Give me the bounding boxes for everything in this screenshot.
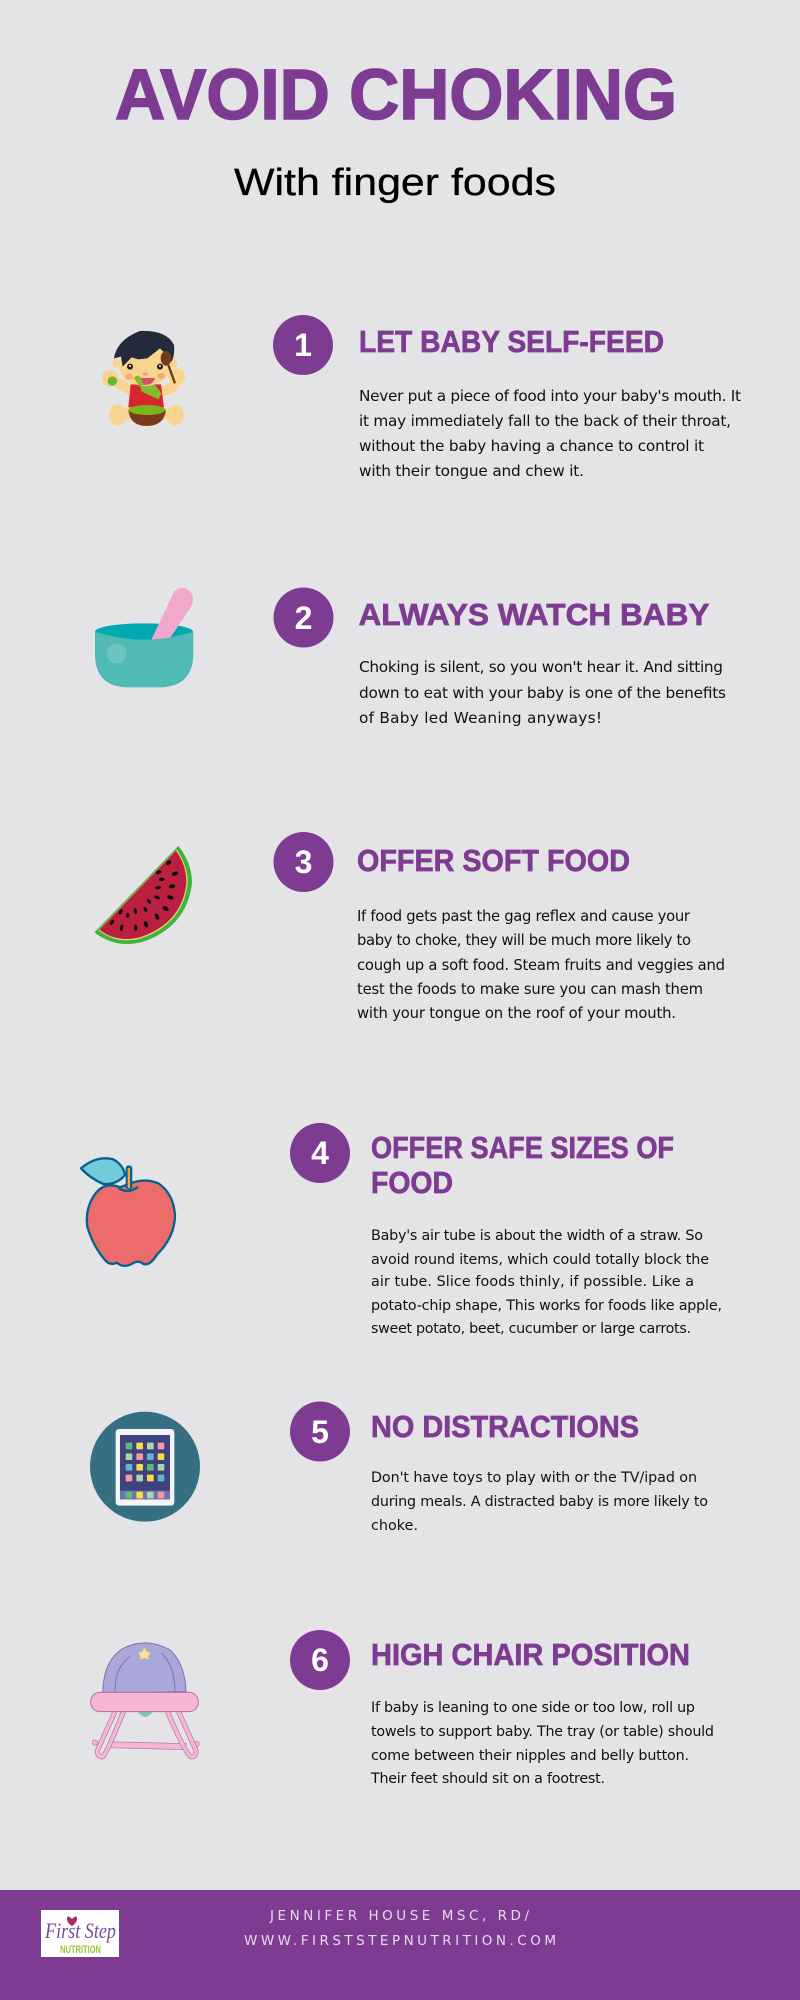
credit text: WWW.FIRSTSTEPNUTRITION.COM <box>244 1933 556 1949</box>
number badge 2 <box>274 588 334 648</box>
text block 3: test the foods to make sure you can mash them <box>357 981 703 998</box>
number badge 6 <box>290 1630 350 1690</box>
heading 4: OFFER SAFE SIZES OF <box>371 1131 674 1165</box>
text block 2: down to eat with your baby is one of the benefits <box>359 684 726 702</box>
title: AVOID CHOKING <box>115 56 677 135</box>
step 4 <box>81 1123 722 1337</box>
logo: First Step <box>44 1918 116 1943</box>
text block 3: cough up a soft food. Steam fruits and veggies and <box>357 957 725 974</box>
heading 4: FOOD <box>371 1166 453 1200</box>
text block 1 <box>359 387 741 480</box>
text block 6: come between their nipples and belly button. <box>371 1748 689 1764</box>
number badge 6: 6 <box>311 1642 329 1678</box>
text block 1: without the baby having a chance to control it <box>359 437 704 455</box>
text block 4: avoid round items, which could totally block the <box>371 1252 709 1268</box>
text block 4: Baby's air tube is about the width of a straw. So <box>371 1228 703 1244</box>
number badge 5 <box>290 1402 350 1462</box>
text block 5: Don't have toys to play with or the TV/ipad on <box>371 1470 697 1486</box>
text block 4: air tube. Slice foods thinly, if possible. Like a <box>371 1274 694 1290</box>
number badge 2: 2 <box>295 600 312 636</box>
text block 2: of Baby led Weaning anyways! <box>359 709 602 727</box>
text block 1: Never put a piece of food into your baby's mouth. It <box>359 387 741 405</box>
subtitle: With finger foods <box>234 162 556 204</box>
icon: apple <box>81 1158 175 1266</box>
credit text <box>244 1908 556 1949</box>
heading 3: OFFER SOFT FOOD <box>357 844 630 878</box>
footer band <box>0 1890 800 2000</box>
text block 6 <box>370 1700 714 1787</box>
text block 3: with your tongue on the roof of your mouth. <box>357 1005 676 1022</box>
step 3 <box>94 832 725 1022</box>
footer <box>0 1890 800 2000</box>
icon: high chair <box>91 1643 199 1757</box>
number badge 4 <box>290 1123 350 1183</box>
text block 6: towels to support baby. The tray (or table) should <box>371 1724 714 1740</box>
step 6 <box>91 1630 714 1787</box>
text block 5: choke. <box>371 1518 418 1534</box>
text block 1: with their tongue and chew it. <box>359 462 584 480</box>
number badge 1: 1 <box>294 327 312 363</box>
heading 2: ALWAYS WATCH BABY <box>358 598 710 632</box>
text block 4: sweet potato, beet, cucumber or large carrots. <box>371 1321 691 1337</box>
text block 3: baby to choke, they will be much more likely to <box>357 932 691 949</box>
number badge 1 <box>273 315 333 375</box>
text block 1: it may immediately fall to the back of their throat, <box>359 412 731 430</box>
step 2 <box>95 588 726 727</box>
icon: watermelon <box>94 846 192 944</box>
text block 5 <box>371 1470 708 1534</box>
text block 3 <box>357 908 725 1022</box>
number badge 5: 5 <box>311 1414 329 1450</box>
heading 6: HIGH CHAIR POSITION <box>371 1638 690 1672</box>
text block 3: If food gets past the gag reflex and cause your <box>357 908 691 925</box>
text block 2 <box>359 658 726 727</box>
step 5 <box>90 1402 708 1534</box>
step 1 <box>102 315 741 480</box>
credit text: JENNIFER HOUSE MSC, RD/ <box>269 1908 529 1924</box>
text block 6: Their feet should sit on a footrest. <box>370 1771 605 1787</box>
heading 1: LET BABY SELF-FEED <box>359 325 664 359</box>
heading 4 <box>371 1131 674 1200</box>
icon: bowl and spoon <box>95 588 193 687</box>
text block 4: potato-chip shape, This works for foods like apple, <box>371 1298 722 1314</box>
text block 6: If baby is leaning to one side or too low, roll up <box>371 1700 695 1716</box>
text block 2: Choking is silent, so you won't hear it. And sitting <box>359 658 723 676</box>
icon: tablet <box>90 1412 200 1522</box>
icon: baby eating <box>102 331 185 426</box>
logo <box>41 1910 119 1957</box>
logo: NUTRITION <box>60 1944 101 1956</box>
text block 5: during meals. A distracted baby is more likely to <box>371 1494 708 1510</box>
number badge 4: 4 <box>311 1135 329 1171</box>
text block 4 <box>371 1228 722 1337</box>
heading 5: NO DISTRACTIONS <box>371 1410 639 1444</box>
number badge 3: 3 <box>295 844 312 880</box>
number badge 3 <box>274 832 334 892</box>
